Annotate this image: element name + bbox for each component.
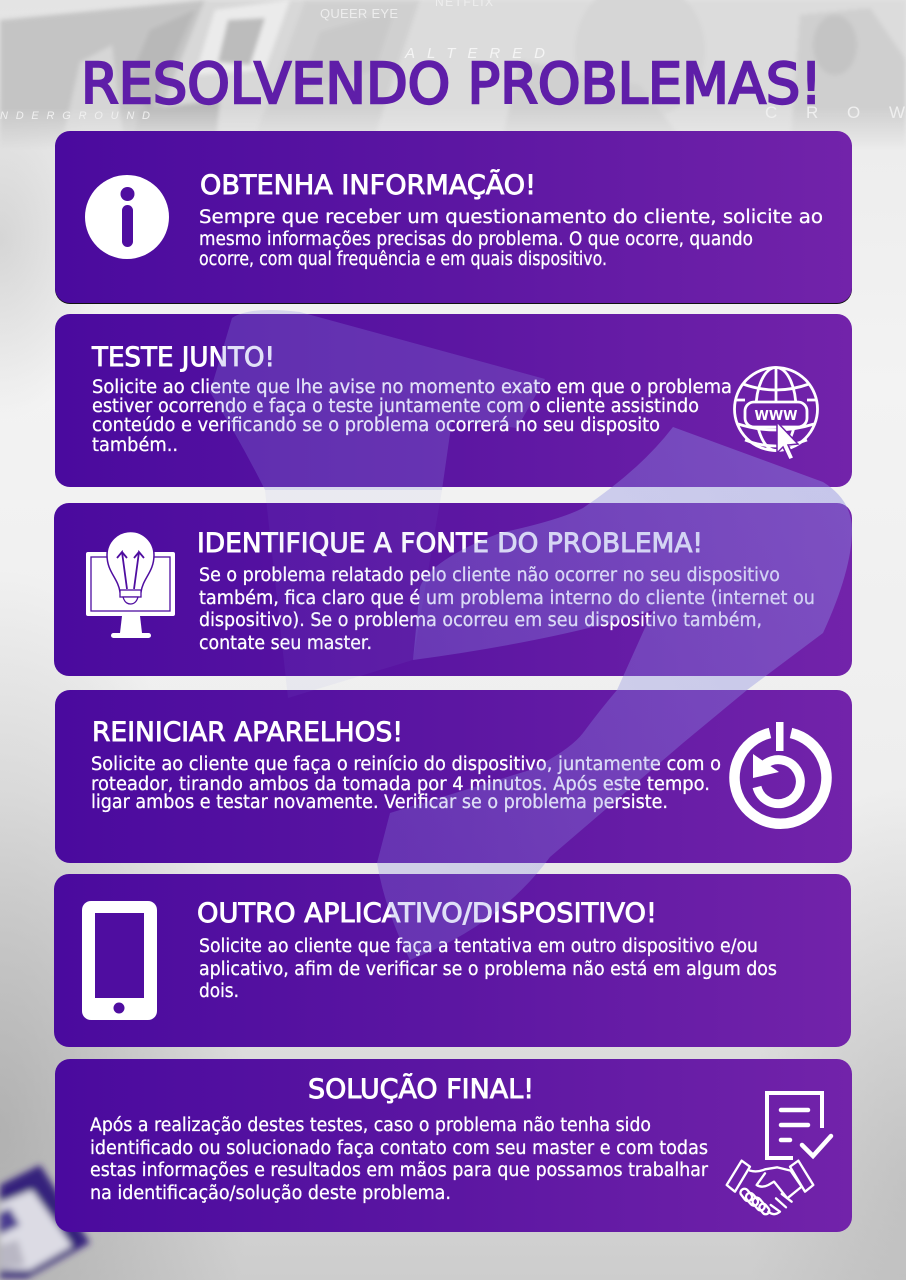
text block	[91, 754, 721, 813]
watermark: translucent play logo	[210, 310, 852, 960]
text block: Solicite ao cliente que faça a tentativa em outro dispositivo e/ou	[199, 936, 758, 957]
text block: também, fica claro que é um problema interno do cliente (internet ou	[199, 588, 815, 609]
icon: globe www: WWW	[754, 409, 798, 424]
text block	[90, 1115, 708, 1204]
icon: handshake	[727, 1161, 813, 1214]
icon: smartphone	[82, 901, 157, 1020]
text block: ocorre, com qual frequência e em quais dispositivo.	[199, 249, 607, 270]
text block: Solicite ao cliente que lhe avise no momento exato em que o problema	[92, 377, 732, 398]
background with faded posters: ALTERED	[404, 45, 545, 62]
text block: Sempre que receber um questionamento do cliente, solicite ao	[199, 207, 823, 228]
text block	[199, 207, 823, 270]
icon: power restart	[734, 722, 826, 824]
panel: reiniciar aparelhos	[55, 690, 852, 863]
text block	[92, 377, 732, 456]
text block: contate seu master.	[199, 633, 372, 654]
icon: monitor with light bulb	[86, 531, 175, 638]
text block: estas informações e resultados em mãos para que possamos trabalhar	[90, 1160, 708, 1181]
panel: obtenha informação	[55, 131, 852, 304]
text block: Se o problema relatado pelo cliente não ocorrer no seu dispositivo	[199, 565, 780, 586]
text block: ligar ambos e testar novamente. Verificar se o problema persiste.	[91, 792, 668, 813]
text block: também..	[92, 435, 178, 456]
background with faded posters: CROW	[765, 103, 905, 122]
background with faded posters: QUEER EYE	[320, 6, 398, 21]
text block: dispositivo). Se o problema ocorreu em seu dispositivo também,	[199, 610, 762, 631]
text block: Solicite ao cliente que faça o reinício do dispositivo, juntamente com o	[91, 754, 721, 775]
text block: identificado ou solucionado faça contato com seu master e com todas	[90, 1138, 708, 1159]
heading: TESTE JUNTO!	[91, 342, 275, 373]
heading: REINICIAR APARELHOS!	[92, 717, 403, 748]
title: RESOLVENDO PROBLEMAS!	[81, 52, 822, 117]
heading: OUTRO APLICATIVO/DISPOSITIVO!	[197, 898, 657, 929]
panel: identifique a fonte	[54, 503, 852, 676]
text block: na identificação/solução deste problema.	[90, 1183, 451, 1204]
text block: aplicativo, afim de verificar se o problema não está em algum dos	[199, 959, 777, 980]
text block: estiver ocorrendo e faça o teste juntamente com o cliente assistindo	[92, 396, 699, 417]
heading: IDENTIFIQUE A FONTE DO PROBLEMA!	[197, 528, 703, 559]
text block: conteúdo e verificando se o problema ocorrerá no seu disposito	[92, 415, 660, 436]
text block: mesmo informações precisas do problema. O que ocorre, quando	[199, 229, 753, 250]
text block: dois.	[199, 981, 239, 1002]
heading: OBTENHA INFORMAÇÃO!	[200, 169, 536, 201]
panel: teste junto	[55, 314, 852, 487]
text block: Após a realização destes testes, caso o problema não tenha sido	[90, 1115, 651, 1136]
text block: roteador, tirando ambos da tomada por 4 minutos. Após este tempo.	[91, 774, 710, 795]
text block	[199, 565, 815, 654]
icon: globe www	[734, 368, 818, 460]
icon: information	[85, 175, 169, 259]
panel: solução final	[55, 1059, 852, 1232]
icon: blurred thumbs-up	[0, 1165, 90, 1278]
background with faded posters: NDERGROUND	[0, 110, 150, 122]
text block	[199, 936, 777, 1002]
icon: document with check	[767, 1093, 831, 1158]
panel: outro aplicativo	[54, 874, 851, 1047]
heading: SOLUÇÃO FINAL!	[308, 1073, 534, 1105]
